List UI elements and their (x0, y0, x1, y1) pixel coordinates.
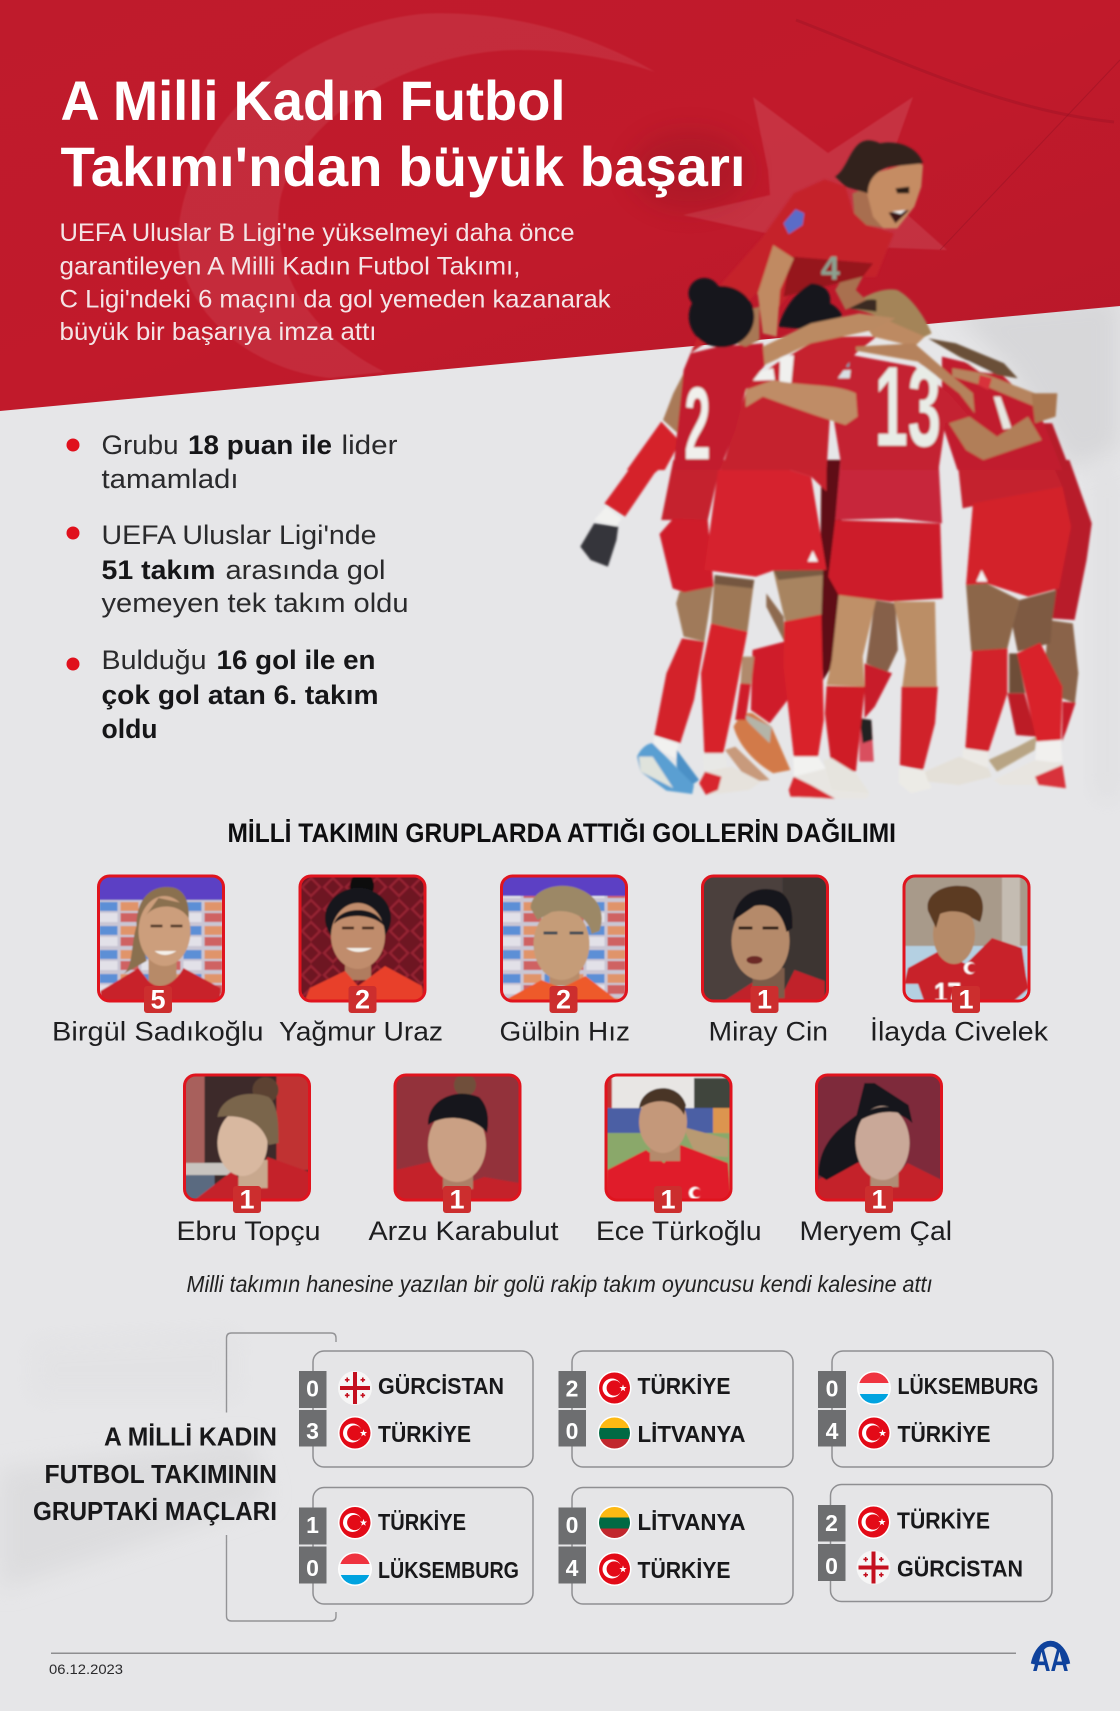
match: Lüksemburg 0-4 Türkiye: 0 (826, 1376, 838, 1402)
flag crescent (faint) (178, 13, 655, 378)
outer right jersey (1038, 423, 1070, 470)
match: Türkiye 1-0 Lüksemburg: TÜRKİYE (378, 1509, 466, 1535)
subtitle text block: garantileyen A Milli Kadın Futbol Takımı, (60, 252, 520, 280)
centre-left player's jersey (722, 337, 877, 470)
player card: Ebru Topçu (176, 1075, 320, 1246)
number-13 player's jersey (828, 353, 970, 470)
player card: Birgül Sadıkoğlu: Birgül Sadıkoğlu (52, 1016, 264, 1046)
leg 6 (894, 602, 937, 687)
player card: Ece Türkoğlu (596, 1075, 762, 1246)
goal badge: 1 (958, 984, 974, 1014)
bullet 2 (66, 520, 408, 618)
title: Takımı'ndan büyük başarı (60, 135, 746, 198)
upper bodies: jerseys, arms, heads: 13 (875, 344, 941, 470)
goal badge: 1 (660, 1184, 676, 1214)
match: Türkiye 2-0 Litvanya: 0 (566, 1418, 578, 1444)
arm sleeve and boot held up (604, 460, 670, 517)
icon: AA logo: AA (1032, 1641, 1068, 1678)
outer right player lower (1050, 460, 1092, 620)
jersey hem center-left (718, 460, 827, 492)
player card: Meryem Çal (800, 1075, 952, 1246)
right player jersey (942, 357, 1062, 470)
jumping player's near arm (758, 245, 794, 337)
number 13 shorts and jersey lower (835, 460, 942, 523)
player card: Miray Cin: Miray Cin (708, 1016, 828, 1046)
goal badge (952, 984, 980, 1014)
bullet 3: oldu (102, 714, 158, 744)
goal badge: 2 (556, 984, 571, 1014)
team celebration group illustration (580, 140, 1092, 799)
player card: İlayda Civelek: İlayda Civelek (870, 1016, 1049, 1046)
matches heading (33, 1422, 277, 1526)
lower bodies: shorts, legs, socks, boots (580, 460, 1092, 799)
flag star (faint) (683, 97, 947, 250)
match: Lüksemburg 0-4 Türkiye: 4 (826, 1418, 839, 1444)
bun player's arm (763, 313, 895, 365)
bun player's neck and hair (735, 307, 759, 347)
matches heading: GRUPTAKİ MAÇLARI (33, 1496, 277, 1526)
match: Gürcistan 0-3 Türkiye: GÜRCİSTAN (378, 1373, 504, 1399)
footer rule (51, 1652, 1016, 1654)
date: 06.12.2023 (49, 1661, 123, 1677)
match: Gürcistan 0-3 Türkiye: 3 (306, 1418, 319, 1444)
bullet 3 (66, 645, 378, 744)
player card: Gülbin Hız (500, 876, 630, 1046)
bullet 2: yemeyen tek takım oldu (102, 588, 408, 618)
goal badge: 1 (871, 1184, 887, 1214)
bullet 3: çok gol atan 6. takım (102, 680, 378, 710)
bullet 1: tamamladı (102, 464, 238, 494)
bullet 1: Grubu (102, 430, 178, 460)
match: Lüksemburg 0-4 Türkiye: TÜRKİYE (898, 1421, 990, 1447)
leg 2 (711, 575, 754, 632)
player card: Miray Cin (702, 876, 828, 1046)
bullet 1: lider (342, 430, 398, 460)
title (60, 69, 746, 198)
leg 7 (966, 583, 1019, 652)
leg 4 (773, 565, 823, 622)
player card: Ebru Topçu: Ebru Topçu (176, 1216, 320, 1246)
jumping player's far arm (835, 273, 866, 310)
bun player's jersey (673, 343, 766, 470)
bun player's back arm and sleeve (663, 373, 685, 440)
match: Türkiye 2-0 Gürcistan: 2 (825, 1510, 838, 1536)
hair behind right (928, 338, 1018, 378)
player card: Meryem Çal: Meryem Çal (800, 1216, 952, 1246)
own-goal footnote: Milli takımın hanesine yazılan bir golü rakip takım oyuncusu kendi kalesine attı (186, 1271, 932, 1297)
title: A Milli Kadın Futbol (60, 69, 566, 132)
match: Lüksemburg 0-4 Türkiye: LÜKSEMBURG (898, 1373, 1038, 1399)
match: Türkiye 2-0 Litvanya: 2 (566, 1376, 578, 1402)
goal badge (865, 1184, 893, 1214)
bullet 3: Bulduğu (102, 645, 206, 675)
goal badge (443, 1184, 471, 1214)
match: Gürcistan 0-3 Türkiye (299, 1351, 533, 1467)
bullet 2: arasında gol (226, 555, 386, 585)
player card: Yağmur Uraz (279, 872, 443, 1046)
match: Türkiye 2-0 Litvanya: TÜRKİYE (638, 1373, 730, 1399)
leg 8 (1013, 590, 1056, 652)
player card: Yağmur Uraz: Yağmur Uraz (279, 1016, 443, 1046)
player card: Ece Türkoğlu: Ece Türkoğlu (596, 1216, 762, 1246)
leg 5 (827, 595, 877, 687)
shorts and jersey right player (957, 460, 1062, 508)
matches heading: FUTBOL TAKIMININ (44, 1459, 277, 1489)
shorts 2 (704, 462, 827, 577)
subtitle text block: C Ligi'ndeki 6 maçını da gol yemeden kazanarak (60, 286, 611, 314)
goal badge: 2 (355, 984, 370, 1014)
leg 1 (676, 587, 713, 642)
match: Türkiye 1-0 Lüksemburg (299, 1488, 533, 1604)
goal badge: 5 (150, 984, 166, 1014)
goal badge (233, 1184, 261, 1214)
player card: İlayda Civelek (870, 876, 1049, 1046)
bullet 2: UEFA Uluslar Ligi'nde (102, 520, 376, 550)
red header band with Turkish flag motif (0, 0, 1120, 411)
goal badge (348, 984, 376, 1014)
hugging arms (746, 380, 858, 425)
section heading: goal distribution: MİLLİ TAKIMIN GRUPLARDA ATTIĞI GOLLERİN DAĞILIMI (228, 817, 896, 848)
player card: İlayda Civelek: 17 (934, 977, 961, 1008)
back legs (1045, 620, 1078, 703)
match: Litvanya 0-4 Türkiye: 4 (566, 1555, 579, 1581)
goal badge (750, 984, 778, 1014)
upper bodies: jerseys, arms, heads: 4 (821, 250, 840, 287)
match: Türkiye 1-0 Lüksemburg: 1 (306, 1512, 319, 1538)
match: Litvanya 0-4 Türkiye: 0 (566, 1512, 578, 1538)
matches heading: A MİLLİ KADIN (104, 1422, 277, 1452)
match: Türkiye 2-0 Gürcistan: GÜRCİSTAN (897, 1556, 1023, 1582)
match: Türkiye 2-0 Gürcistan: 0 (825, 1553, 838, 1579)
bracket around match cards (226, 1333, 336, 1621)
jumping player's neck and face (852, 187, 885, 228)
match: Lüksemburg 0-4 Türkiye (818, 1351, 1053, 1467)
player card: Birgül Sadıkoğlu (52, 876, 264, 1046)
bullet 1 (66, 430, 398, 494)
player card: Arzu Karabulut: Arzu Karabulut (368, 1216, 559, 1246)
match: Litvanya 0-4 Türkiye (558, 1488, 793, 1604)
match: Gürcistan 0-3 Türkiye: TÜRKİYE (378, 1421, 471, 1447)
subtitle text block: büyük bir başarıya imza attı (60, 318, 376, 346)
goal badge: 1 (449, 1184, 465, 1214)
jumping player's jersey (691, 179, 894, 353)
upper bodies: jerseys, arms, heads (627, 140, 1070, 482)
match: Türkiye 1-0 Lüksemburg: LÜKSEMBURG (378, 1557, 519, 1583)
goal badge (144, 984, 172, 1014)
upper bodies: jerseys, arms, heads: 2 (684, 367, 711, 482)
goal badge (550, 984, 578, 1014)
match: Türkiye 2-0 Gürcistan (818, 1484, 1052, 1602)
blonde hair (849, 289, 932, 338)
goal badge: 1 (757, 984, 772, 1014)
player card: Gülbin Hız: Gülbin Hız (500, 1016, 630, 1046)
match: Türkiye 1-0 Lüksemburg: 0 (306, 1555, 319, 1581)
goal badge: 1 (239, 1184, 255, 1214)
dark gap between players (820, 460, 842, 680)
match: Litvanya 0-4 Türkiye: LİTVANYA (638, 1509, 746, 1535)
player card: Arzu Karabulut (368, 1074, 559, 1246)
match: Gürcistan 0-3 Türkiye: 0 (306, 1376, 319, 1402)
bullet 2: 51 takım (102, 555, 216, 585)
match: Litvanya 0-4 Türkiye: TÜRKİYE (638, 1557, 730, 1583)
centre dark hair (778, 283, 842, 330)
match: Türkiye 2-0 Litvanya (558, 1351, 793, 1467)
match: Türkiye 2-0 Litvanya: LİTVANYA (638, 1421, 746, 1447)
subtitle text block: UEFA Uluslar B Ligi'ne yükselmeyi daha önce (60, 219, 574, 247)
goal badge (654, 1184, 682, 1214)
bullet 1: 18 puan ile (188, 430, 332, 460)
subtitle text block (60, 219, 611, 346)
bullet 3: 16 gol ile en (216, 645, 376, 675)
match: Türkiye 2-0 Gürcistan: TÜRKİYE (897, 1508, 990, 1534)
bullet list (66, 430, 408, 744)
lower-left jersey + shorts (661, 460, 722, 520)
